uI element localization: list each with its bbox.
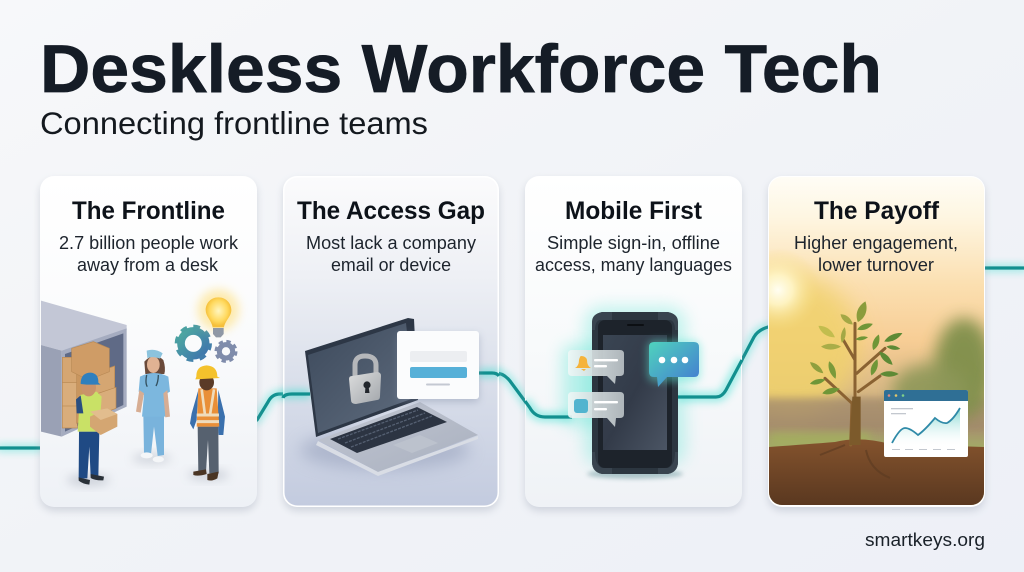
text: payoff description: lower turnover [818,255,934,275]
phone glow [525,306,742,466]
panel: The Frontline [40,176,257,511]
icon: growing tree [808,300,904,445]
text: frontline description: 2.7 billion people work [59,233,239,253]
text: mobile description: Simple sign-in, offline [547,233,720,253]
icon: gears [177,327,236,361]
heading: Mobile First: Mobile First [565,197,703,225]
connector line: outer segments [0,268,1024,448]
heading: The Frontline: The Frontline [72,197,225,225]
icon: chat bubble [647,340,701,387]
construction worker [188,365,229,481]
text: frontline description: away from a desk [77,255,219,275]
chart: growth dashboard [884,390,968,457]
worker with box [67,373,117,486]
subtitle: Connecting frontline teams [40,105,428,141]
dialog card [397,331,479,402]
heading: The Payoff: The Payoff [814,197,940,225]
icon: app notification bubble [568,392,624,427]
scene: sunset background [769,251,984,505]
text: mobile description: access, many languages [535,255,732,275]
heading: The Access Gap: The Access Gap [297,197,485,225]
text: frontline description [59,233,239,275]
illustration: workers and container [41,289,239,486]
text: access gap description: email or device [331,255,451,275]
nurse [132,350,171,464]
text: payoff description: Higher engagement, [794,233,958,253]
shipping container [41,301,127,437]
connector through card 2 [283,373,499,398]
panel: The Access Gap [283,176,499,511]
icon: laptop with lock [300,318,479,476]
panel: Mobile First [525,176,742,511]
icon: padlock [349,356,381,404]
text: access gap description: Most lack a company [306,233,476,253]
source credit: smartkeys.org [865,530,985,550]
panel: The Payoff [765,176,988,514]
icon: light bulb [198,289,239,337]
text: access gap description [306,233,476,275]
icon: bell notification bubble [568,350,624,384]
icon: rugged phone [587,312,683,479]
text: payoff description [794,233,958,275]
text: mobile description [535,233,732,275]
title: Deskless Workforce Tech [40,31,882,107]
connector through card 3 [525,360,742,417]
